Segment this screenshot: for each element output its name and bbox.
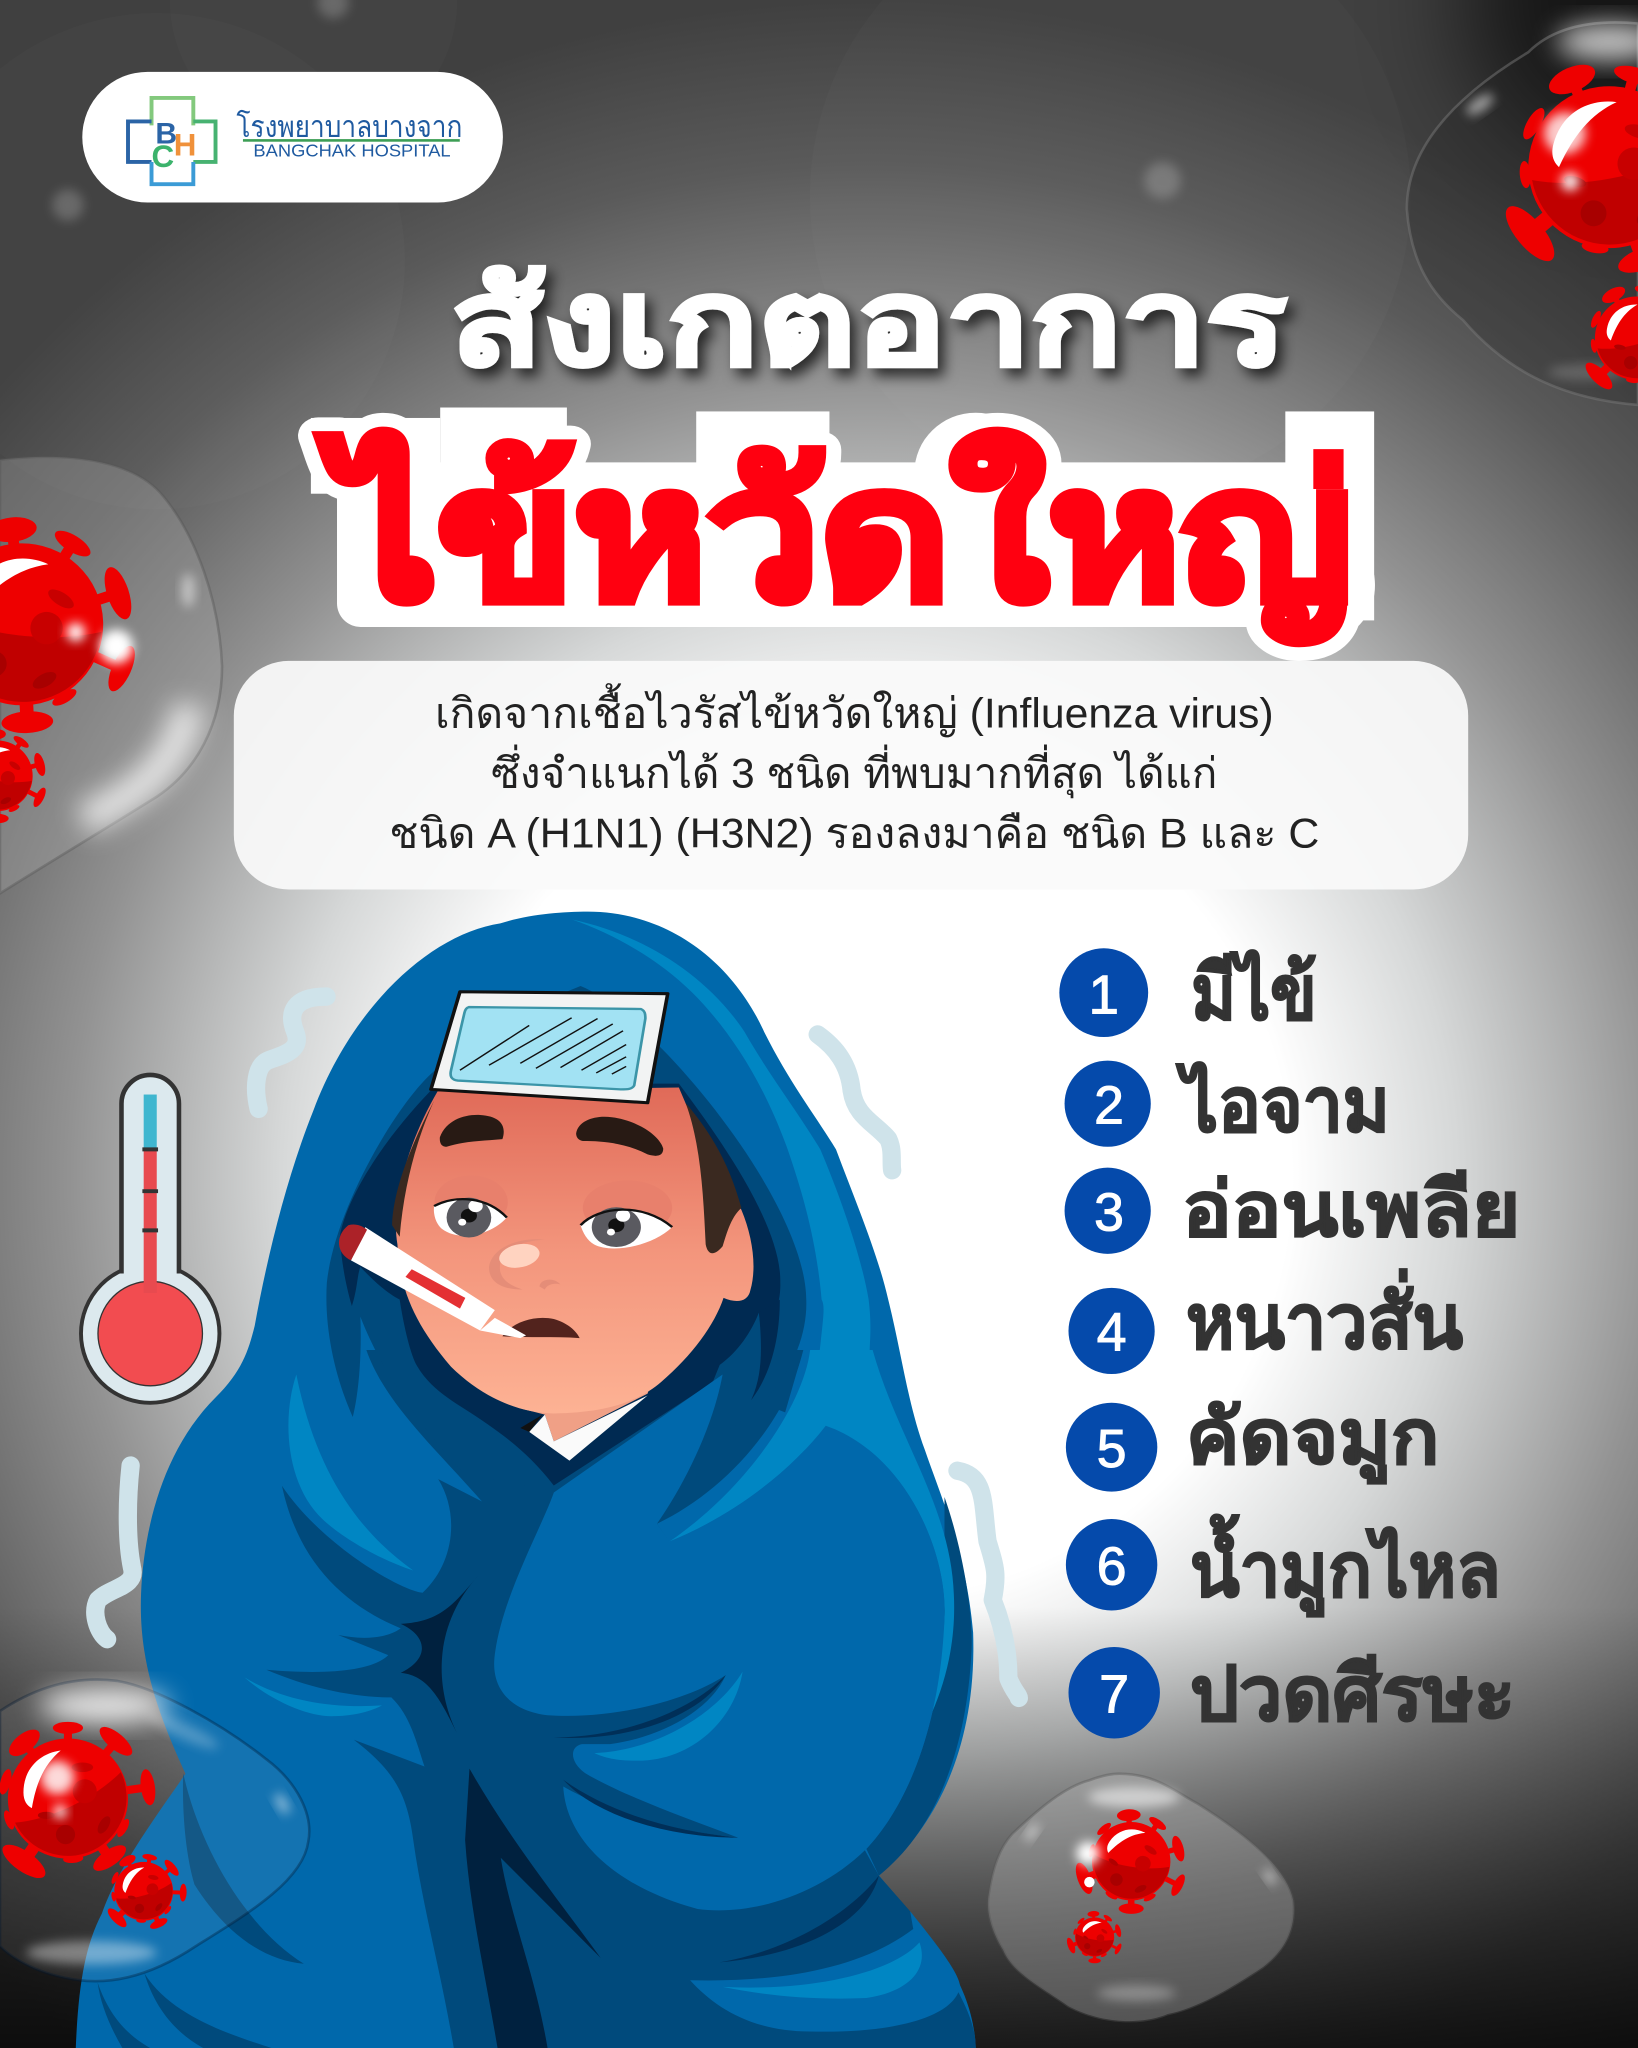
glare on virus bottom left	[40, 1761, 74, 1818]
symptom 4: 4	[1097, 1304, 1126, 1363]
symptom list	[1059, 948, 1520, 1738]
title line 2 red: ไข้หวัดใหญ่	[318, 431, 1352, 643]
virus: left small	[0, 715, 66, 847]
info text: ซึ่งจำแนกได้ 3 ชนิด ที่พบมากที่สุด ได้แก่	[491, 745, 1217, 799]
left eye	[434, 1198, 507, 1237]
cooling pad	[431, 992, 668, 1103]
virus: bottom left small	[102, 1848, 193, 1940]
glare on virus left	[67, 623, 133, 664]
symptom 5: 5	[1097, 1420, 1126, 1479]
info panel	[234, 661, 1468, 889]
glare on virus bottom center	[1076, 1842, 1100, 1887]
symptom 1: มีไข้	[1191, 949, 1317, 1036]
symptom 5: คัดจมูก	[1186, 1395, 1439, 1484]
symptom 6: น้ำมูกไหล	[1190, 1514, 1501, 1617]
symptom 1: 1	[1088, 964, 1119, 1026]
symptom 7: ปวดศีรษะ	[1190, 1652, 1515, 1737]
symptom 4: หนาวสั่น	[1186, 1268, 1463, 1365]
symptom 6: 6	[1097, 1537, 1126, 1596]
blanket folds	[98, 1350, 972, 2048]
bubble: left	[0, 457, 222, 893]
oral thermometer	[339, 1224, 526, 1338]
thermometer icon	[81, 1075, 219, 1403]
person wrapped in blanket	[76, 912, 976, 2048]
hood light stripe	[572, 920, 907, 1450]
bubble: top right	[1407, 22, 1638, 405]
blanket silhouette	[76, 912, 976, 2048]
virus: bottom center small	[1060, 1903, 1133, 1977]
virus: top right small	[1578, 277, 1638, 408]
symptom 5	[1066, 1395, 1439, 1492]
hospital name Thai: โรงพยาบาลบางจาก	[236, 109, 462, 144]
hospital name English: BANGCHAK HOSPITAL	[253, 141, 451, 161]
logo cross mark: H	[174, 127, 196, 162]
hood interior	[326, 986, 806, 1491]
virus: bottom center large	[1061, 1794, 1208, 1940]
glare on virus top right	[1544, 112, 1586, 191]
face	[396, 1087, 753, 1413]
mouth	[502, 1318, 580, 1338]
info text: เกิดจากเชื้อไวรัสไข้หวัดใหญ่ (Influenza virus)	[435, 683, 1274, 738]
virus: top right large	[1487, 43, 1638, 310]
symptom 6	[1066, 1514, 1501, 1617]
info text: ชนิด A (H1N1) (H3N2) รองลงมาคือ ชนิด B และ C	[389, 810, 1319, 857]
title line 2 red: ไข้หวัดใหญ่	[318, 431, 1352, 643]
symptom 1	[1059, 948, 1317, 1037]
logo cross mark	[128, 98, 216, 184]
symptom 2: ไอจาม	[1176, 1061, 1390, 1148]
virus: left large	[0, 486, 179, 786]
symptom 2: 2	[1094, 1076, 1124, 1135]
right eye	[581, 1207, 672, 1248]
right eyebrow	[576, 1117, 663, 1156]
nose	[489, 1239, 560, 1290]
blanket dark base	[266, 1350, 976, 2048]
bubble: bottom center	[988, 1774, 1294, 2021]
white outline plate	[311, 408, 1375, 648]
symptom 2	[1065, 1061, 1390, 1148]
symptom 7	[1068, 1647, 1515, 1738]
virus: bottom left large	[0, 1722, 157, 1884]
shiver lines	[95, 997, 1019, 1698]
eyelids	[435, 1175, 508, 1229]
lapel below ear	[705, 1313, 762, 1400]
bubble: bottom left	[0, 1680, 309, 1981]
dark tail beside lapel	[751, 1300, 780, 1400]
symptom 4	[1068, 1268, 1463, 1374]
logo cross mark: C	[152, 139, 174, 174]
title line 1: สังเกตอาการ	[451, 256, 1287, 390]
symptom 3	[1065, 1168, 1520, 1254]
info text	[389, 683, 1319, 857]
symptom 7: 7	[1099, 1665, 1129, 1724]
left eyebrow	[440, 1115, 504, 1147]
head	[339, 992, 753, 1461]
logo pill	[82, 72, 503, 202]
neck and collar	[520, 1378, 652, 1461]
symptom 3: 3	[1094, 1183, 1124, 1242]
logo cross mark: B	[155, 118, 177, 151]
symptom 3: อ่อนเพลีย	[1182, 1168, 1520, 1253]
hair	[392, 1101, 741, 1253]
